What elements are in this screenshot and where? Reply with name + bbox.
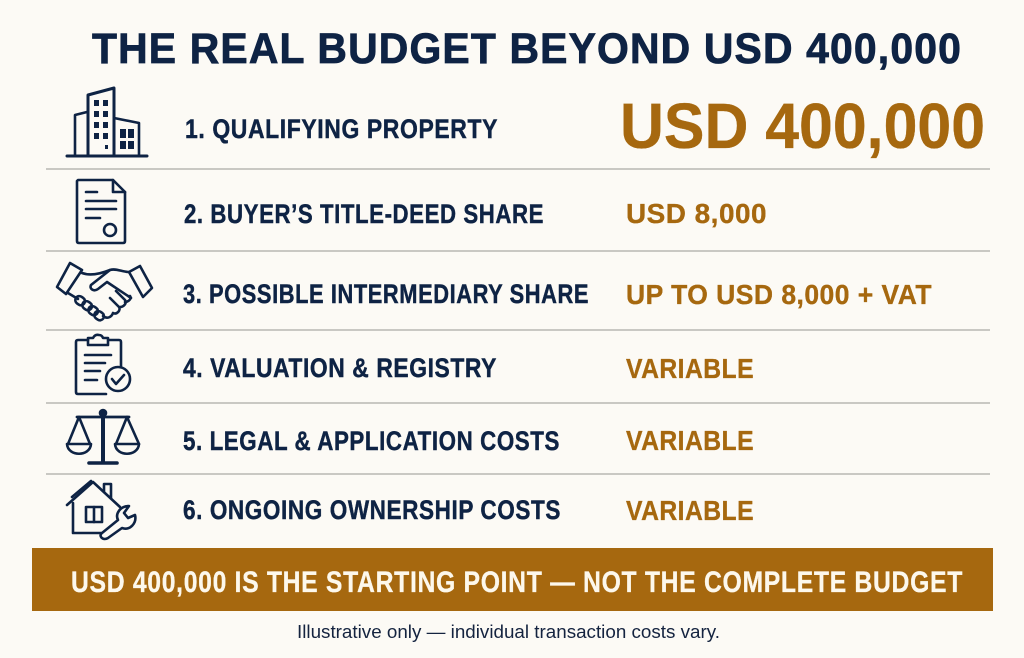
label: qualifying property: 1. QUALIFYING PROPERTY <box>185 114 498 144</box>
row 3: intermediary share <box>57 263 932 322</box>
label: intermediary share: 3. POSSIBLE INTERMEDIARY SHARE <box>183 279 589 309</box>
value: USD 8,000: USD 8,000 <box>626 198 767 229</box>
label: legal and application: 5. LEGAL & APPLICATION COSTS <box>183 426 560 456</box>
icon: house with wrench <box>67 481 135 539</box>
row 6: ongoing ownership <box>67 481 754 539</box>
icon: handshake <box>57 263 152 322</box>
row 4: valuation and registry <box>76 335 754 394</box>
value: variable: VARIABLE <box>626 353 754 384</box>
row 1: qualifying property <box>67 88 985 162</box>
footnote: Illustrative only — individual transaction costs vary. <box>297 622 720 642</box>
label: ongoing ownership: 6. ONGOING OWNERSHIP COSTS <box>183 495 561 525</box>
value: USD 400,000: USD 400,000 <box>620 90 985 162</box>
icon: document <box>77 180 125 243</box>
icon: scales <box>67 410 139 463</box>
icon: buildings <box>67 88 147 156</box>
label: valuation and registry: 4. VALUATION & REGISTRY <box>183 353 497 383</box>
value: up to USD 8,000 + VAT: UP TO USD 8,000 + VAT <box>626 279 932 310</box>
row 2: title-deed share <box>77 180 767 243</box>
title: THE REAL BUDGET BEYOND USD 400,000 <box>92 25 962 73</box>
banner <box>32 548 993 611</box>
label: title-deed share: 2. BUYER’S TITLE-DEED SHARE <box>184 199 544 229</box>
value: variable: VARIABLE <box>626 425 754 456</box>
icon: clipboard with check <box>76 335 130 394</box>
row 5: legal and application <box>67 410 754 463</box>
value: variable: VARIABLE <box>626 495 754 526</box>
